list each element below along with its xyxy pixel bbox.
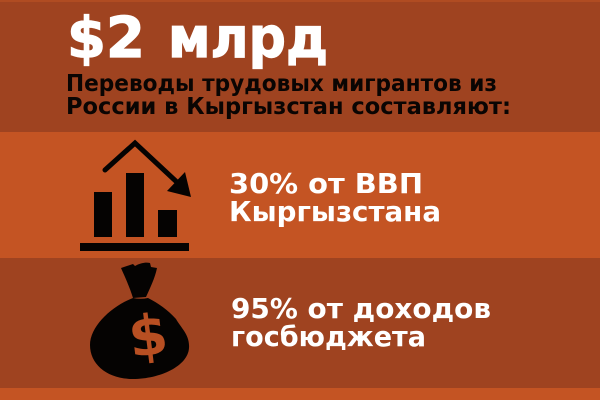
panel: share of GDP — [0, 132, 600, 258]
text: 30% of GDP: 30% от ВВП — [229, 167, 423, 200]
icon: money bag — [90, 263, 189, 379]
text: 30% of GDP — [229, 167, 441, 228]
text: 95% of budget revenue: 95% от доходов — [231, 292, 491, 325]
icon: falling bar chart — [80, 143, 191, 251]
text: 95% of budget revenue — [231, 292, 491, 353]
subtitle: России в Кыргызстан составляют: — [66, 94, 511, 120]
panel: header — [0, 2, 600, 132]
title: млрд — [168, 6, 328, 71]
title: $2 — [67, 6, 145, 71]
text: 95% of budget revenue: госбюджета — [231, 320, 426, 353]
panel: share of budget — [0, 258, 600, 388]
subtitle: Переводы трудовых мигрантов из — [66, 71, 497, 97]
subtitle — [66, 71, 511, 120]
dollar sign: $ — [125, 302, 171, 371]
text: 30% of GDP: Кыргызстана — [229, 195, 441, 228]
